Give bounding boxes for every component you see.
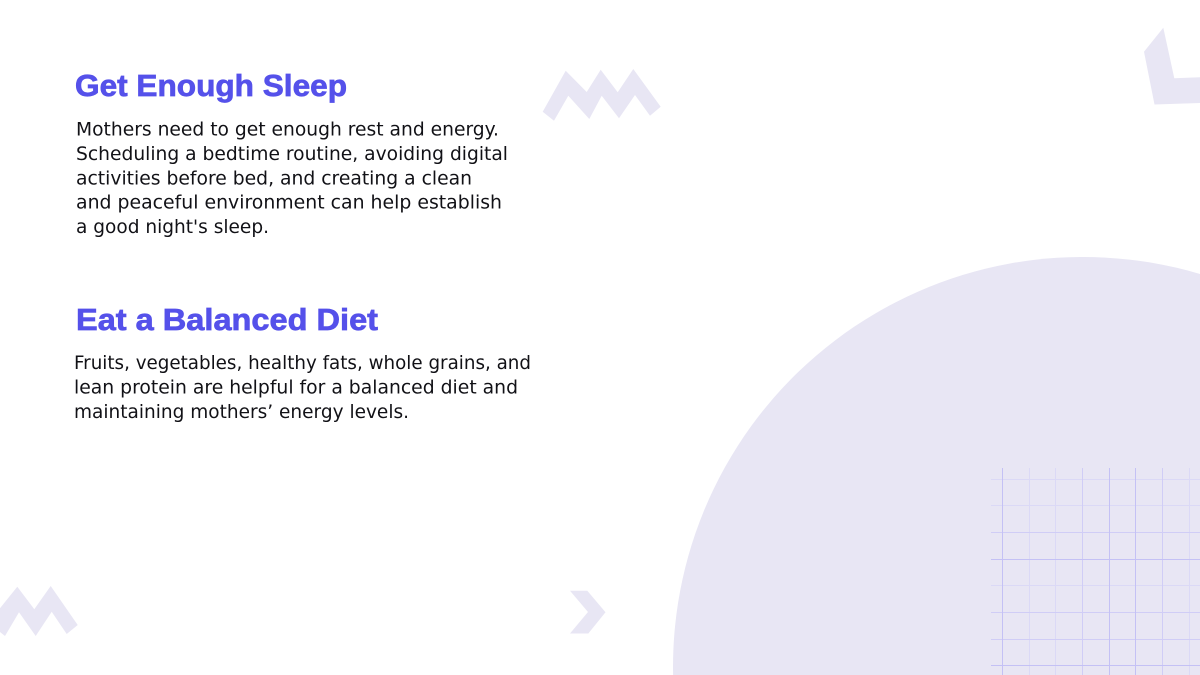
text block: sleep advice: [76, 120, 508, 238]
text block: sleep advice: Scheduling a bedtime routine, avoiding digital: [76, 144, 508, 165]
text block: diet advice: lean protein are helpful for a balanced diet and: [74, 378, 518, 398]
text block: sleep advice: and peaceful environment can help establish: [76, 192, 502, 214]
text block: diet advice: Fruits, vegetables, healthy fats, whole grains, and: [74, 353, 531, 374]
text block: diet advice: maintaining mothers’ energy levels.: [74, 402, 409, 423]
chevron shape bottom: [570, 591, 606, 634]
grid pattern: [991, 468, 1200, 675]
heading: eat a balanced diet: Eat a Balanced Diet: [76, 303, 378, 337]
text block: sleep advice: activities before bed, and creating a clean: [76, 168, 472, 190]
text block: sleep advice: a good night's sleep.: [76, 217, 269, 238]
zigzag shape bottom left: [0, 586, 78, 636]
text block: diet advice: [74, 353, 531, 423]
text block: sleep advice: Mothers need to get enough rest and energy.: [76, 120, 499, 140]
heading: get enough sleep: Get Enough Sleep: [75, 69, 347, 103]
zigzag shape top: [543, 69, 661, 121]
corner shape top right: [1144, 28, 1200, 105]
decorative large circle: [673, 257, 1200, 675]
